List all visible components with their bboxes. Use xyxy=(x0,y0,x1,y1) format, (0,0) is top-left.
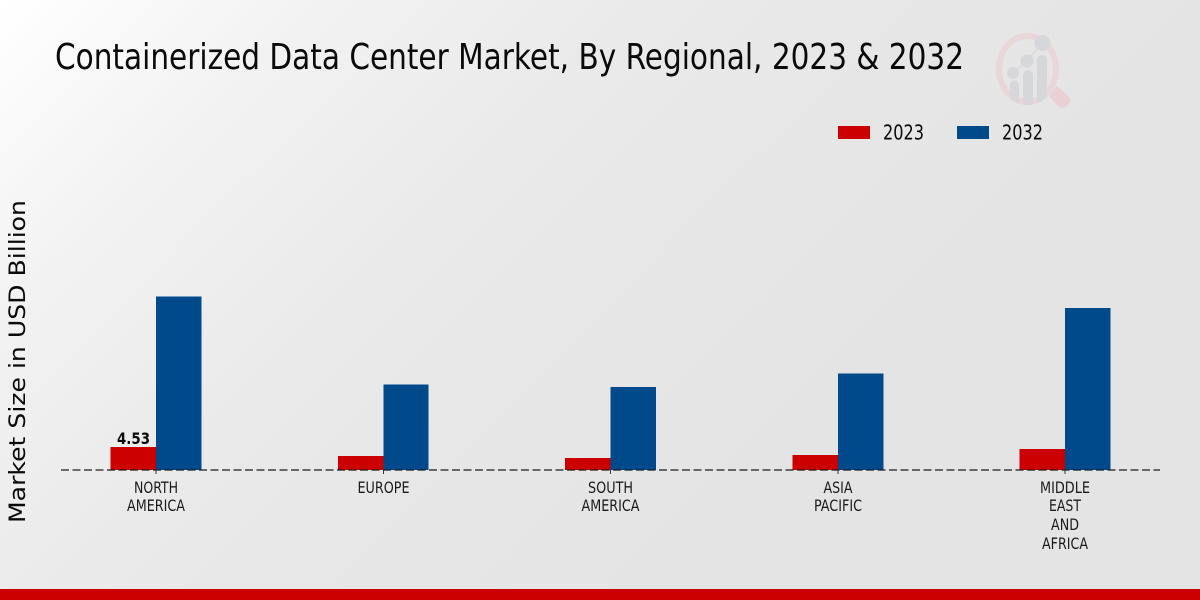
category label: Asia Pacific: PACIFIC xyxy=(814,496,862,515)
bars: South America xyxy=(565,387,656,470)
category label: North America: NORTH xyxy=(134,478,178,497)
bars: Middle East and Africa xyxy=(1020,308,1110,470)
legend xyxy=(838,120,1043,144)
category label: Asia Pacific: ASIA xyxy=(824,478,853,497)
title: Containerized Data Center Market, By Regional, 2023 & 2032 xyxy=(55,37,964,78)
legend item: 2032: 2032 xyxy=(1002,120,1043,144)
category label: Europe: EUROPE xyxy=(358,478,410,497)
icon: magnifier logo xyxy=(999,35,1070,108)
category label: Middle East and Africa: AFRICA xyxy=(1042,534,1088,553)
bottom band xyxy=(0,589,1200,600)
legend item: 2032 xyxy=(957,120,1043,144)
category label: South America: SOUTH xyxy=(588,478,633,497)
legend item: 2023 xyxy=(838,120,924,144)
bars: Europe xyxy=(338,384,428,470)
bar chart xyxy=(61,296,1160,474)
y axis label: Market Size in USD Billion xyxy=(5,200,31,523)
bars: North America xyxy=(110,296,202,470)
data label: 4.53: 4.53 xyxy=(117,429,150,448)
category label: Middle East and Africa: MIDDLE xyxy=(1040,478,1090,497)
legend item: 2023: 2023 xyxy=(883,120,924,144)
bars: Asia Pacific xyxy=(792,374,884,470)
category label: South America: AMERICA xyxy=(582,496,640,515)
category label: Middle East and Africa: AND xyxy=(1051,515,1079,534)
category label: North America: AMERICA xyxy=(127,496,185,515)
category label: Middle East and Africa: EAST xyxy=(1049,496,1081,515)
